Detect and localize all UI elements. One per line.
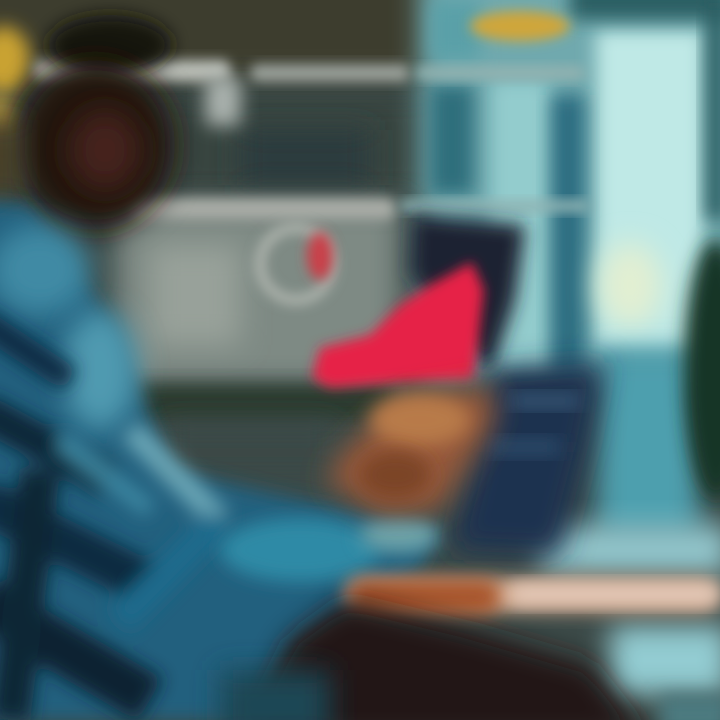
ring chart on tablet — [260, 228, 333, 300]
person: dark hair and face — [0, 15, 175, 230]
plaid bands on shirt — [0, 320, 220, 720]
person: denim shirt — [0, 200, 440, 720]
ceiling lights — [0, 11, 570, 137]
laptop — [450, 362, 605, 555]
foreground dark table — [220, 600, 720, 720]
window: bright panes at right — [430, 0, 720, 695]
table edge — [345, 578, 720, 614]
red area chart — [312, 262, 484, 388]
dark phone / chart frame — [410, 215, 525, 375]
tablet screen panel — [115, 205, 400, 480]
hand holding device — [325, 385, 495, 515]
plant at right edge — [684, 0, 720, 500]
heading: blurred white text bars — [34, 60, 590, 220]
